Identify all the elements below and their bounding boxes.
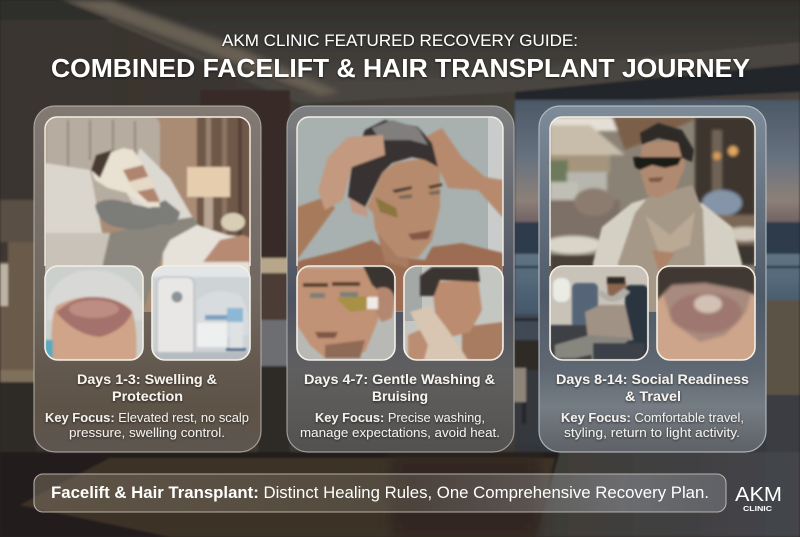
main title: COMBINED FACELIFT & HAIR TRANSPLANT JOURNEY [51,53,750,83]
heading: styling, return to light activity. [564,425,740,440]
photo frame [45,117,250,266]
heading: Days 8-14: Social Readiness [556,371,749,387]
heading: Days 4-7: Gentle Washing & [304,371,495,387]
photo inset: scalp with hairnet [45,266,143,360]
photo: man at seaside cafe [543,117,765,312]
photo: man washing hair [297,117,503,312]
key focus text: Key Focus: Elevated rest, no scalp [45,410,249,425]
heading: pressure, swelling control. [69,425,225,440]
inset border [152,266,250,360]
inset border [550,266,648,360]
heading: Protection [112,388,183,404]
photo frame [297,117,503,266]
panel card [539,106,766,452]
photo frame [550,117,755,266]
heading [556,371,749,440]
photo inset: bruised cheek [297,266,395,360]
heading: Bruising [372,388,428,404]
panel: days 8-14 [539,106,766,452]
bottom summary bar [34,474,726,512]
inset border [297,266,395,360]
heading [300,371,500,440]
logo: AKM Clinic: AKM [735,484,782,506]
logo: AKM Clinic [735,484,782,513]
logo: AKM Clinic: CLINIC [743,506,772,513]
photo: patient resting with bandaged face [45,117,250,312]
key focus text: Key Focus: Precise washing, [315,410,485,425]
photo inset: scalp healing [657,266,755,360]
panel card [34,106,261,452]
heading: manage expectations, avoid heat. [300,425,500,440]
inset border [657,266,755,360]
title block [51,31,750,83]
heading [45,371,249,440]
title kicker: AKM CLINIC FEATURED RECOVERY GUIDE: [222,31,578,50]
key focus text: Key Focus: Comfortable travel, [561,410,744,425]
bottom summary bar: Facelift & Hair Transplant: Distinct Healing Rules, One Comprehensive Recovery Plan. [51,484,709,502]
inset border [45,266,143,360]
photo inset: hyperbaric chamber [152,266,250,360]
panel card [287,106,514,452]
heading: & Travel [625,388,681,404]
photo inset: drying with towel [404,266,503,360]
heading: Days 1-3: Swelling & [77,371,217,387]
panel: days 4-7 [287,106,514,452]
inset border [404,266,503,360]
panel: days 1-3 [34,106,261,452]
photo inset: airplane seat [550,266,648,360]
